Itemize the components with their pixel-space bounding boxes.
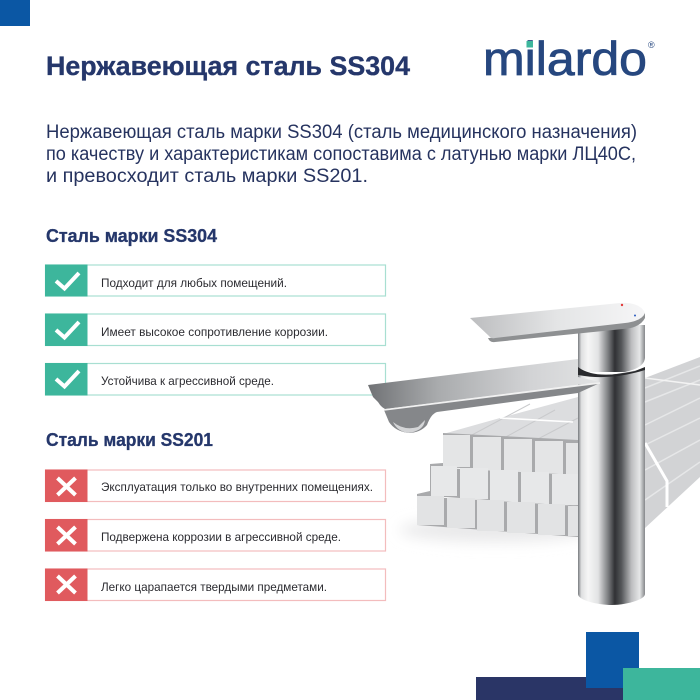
heading: SS201: Сталь марки SS201 — [46, 429, 213, 450]
benefit row 1 — [45, 264, 386, 296]
heading: SS304: Сталь марки SS304 — [46, 225, 218, 246]
aerator highlight — [393, 420, 425, 433]
drawback row 1 — [45, 470, 386, 502]
panel: SS201 drawbacks — [45, 470, 386, 601]
brick row 2 — [430, 463, 578, 506]
benefit row 1: Подходит для любых помещений. — [101, 276, 287, 290]
logo: milardo: milardo — [483, 32, 647, 85]
corner square top-left — [0, 0, 30, 26]
illustration: chrome faucet — [368, 303, 645, 605]
handle edge — [488, 313, 645, 342]
faucet upper body — [578, 325, 645, 372]
spout front edge — [384, 383, 600, 410]
faucet lower body — [578, 368, 645, 605]
panel: SS304 benefits — [45, 264, 386, 396]
drawback row 3 — [45, 568, 386, 601]
brick row 3 — [417, 491, 578, 537]
title: Нержавеющая сталь SS304 — [46, 51, 410, 81]
corner blocks bottom-right — [476, 632, 700, 700]
intro paragraph — [46, 122, 637, 187]
drawback row 2: Подвержена коррозии в агрессивной среде. — [101, 530, 341, 544]
spout base shadow — [578, 367, 645, 377]
drawback row 3: Легко царапается твердыми предметами. — [101, 580, 327, 594]
handle markers — [621, 304, 623, 306]
handle top plate — [470, 303, 645, 338]
drawback row 1: Эксплуатация только во внутренних помещениях. — [101, 480, 373, 494]
spout underside and aerator — [384, 383, 600, 433]
long bars receding right — [578, 357, 700, 528]
intro paragraph: и превосходит сталь марки SS201. — [46, 166, 368, 187]
brick top surface — [443, 397, 578, 442]
logo: milardo: ® — [648, 40, 655, 50]
benefit row 3: Устойчива к агрессивной среде. — [101, 374, 274, 388]
spout plate — [368, 359, 600, 409]
illustration: stacked steel bars — [400, 357, 700, 542]
benefit row 2: Имеет высокое сопротивление коррозии. — [101, 325, 328, 339]
intro paragraph: по качеству и характеристикам сопоставима с латунью марки ЛЦ40С, — [46, 144, 636, 165]
benefit row 3 — [45, 363, 386, 396]
drawback row 2 — [45, 519, 386, 552]
benefit row 2 — [45, 314, 386, 346]
brick row 1 — [443, 433, 578, 475]
intro paragraph: Нержавеющая сталь марки SS304 (сталь медицинского назначения) — [46, 122, 637, 143]
